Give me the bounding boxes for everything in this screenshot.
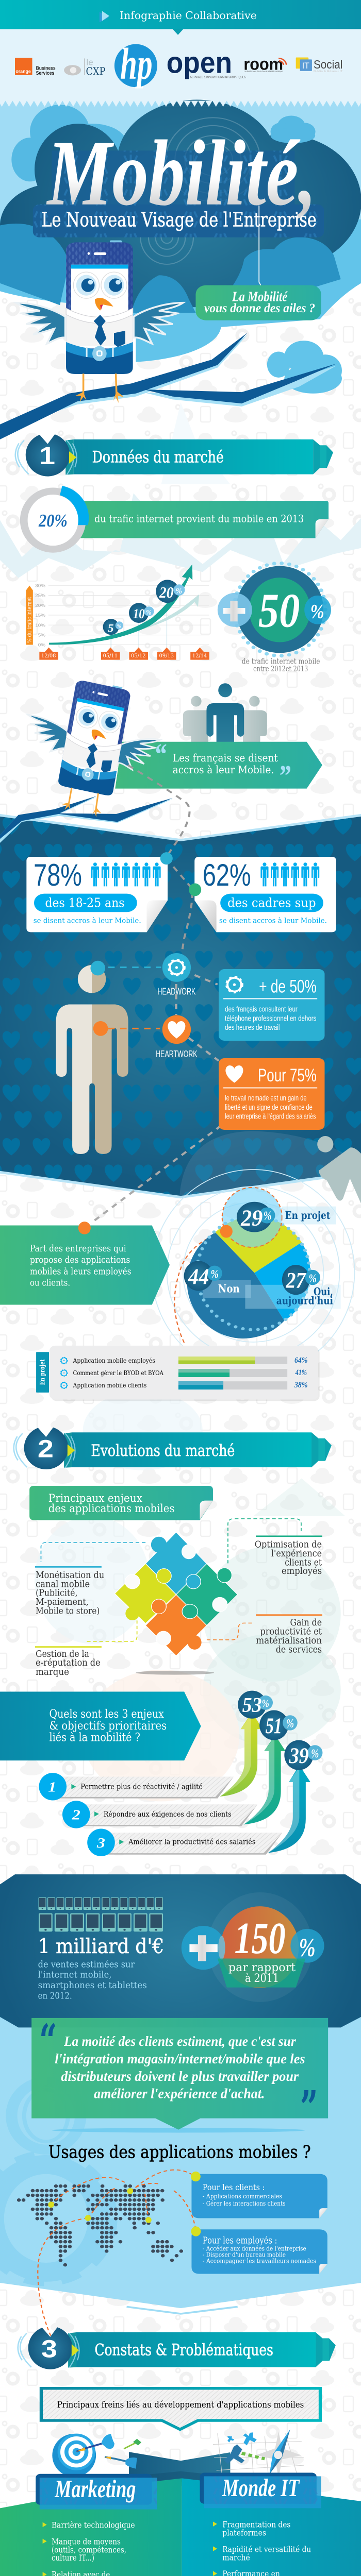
sales description: l'internet mobile, [38, 1969, 112, 1980]
logo: orange business services: Business [36, 66, 56, 71]
owl mascot and branches [0, 240, 342, 439]
quote box: La moitié des clients estiment, que c'est sur [63, 2033, 296, 2049]
logo: orange business services [15, 58, 56, 76]
card: pour les employés: Pour les employés : [203, 2235, 277, 2246]
pie labels: 44 [188, 1264, 209, 1289]
legend panel: projects: 41% [295, 1368, 307, 1377]
pie labels: aujourd'hui [276, 1295, 333, 1307]
logo: le CXP: CXP [86, 65, 105, 78]
caption under +50% [242, 657, 320, 673]
green banner: share of companies: Part des entreprises qui [30, 1243, 126, 1254]
line chart: mobile traffic: 25% [35, 593, 45, 598]
section 1: données du marché [0, 402, 361, 660]
green banner: share of companies [0, 1222, 170, 1305]
legend panel: projects: En projet [38, 1359, 46, 1385]
orange dash path to legend [174, 1235, 214, 1345]
label: gain de productivité: productivité et [260, 1627, 322, 1637]
line chart: mobile traffic: 0% [38, 642, 45, 648]
bubble 51%: 51 [266, 1714, 282, 1738]
line chart: mobile traffic: 05/12 [131, 653, 146, 659]
icon: compass and map [213, 2429, 304, 2478]
header: title bar, logos and cloud sky [0, 0, 361, 362]
hanging sign: La Mobilité [232, 289, 288, 304]
card: + de 50%: des français consultent leur [225, 1005, 298, 1013]
logo: le CXP [64, 58, 105, 78]
green banner: 20% traffic: du trafic internet provient du mobile en 2013 [94, 513, 304, 524]
priority 1 [39, 1773, 234, 1801]
logo: open: SERVICES & INNOVATIONS INFORMATIQUES [190, 76, 246, 79]
pie labels: % [309, 1272, 317, 1285]
green banner: 20% traffic [79, 501, 329, 538]
grey dashed connector [128, 765, 192, 953]
card: pour les clients [191, 2172, 327, 2218]
rising arrow 3 [268, 1765, 310, 1853]
section heading 3: Constats & Problématiques [94, 2341, 273, 2359]
legend panel: projects: 64% [294, 1355, 307, 1364]
bubble 39% [284, 1740, 322, 1770]
quote box: distributeurs doivent le plus travailler pour [61, 2068, 299, 2084]
list: marketing obstacles [43, 2520, 135, 2576]
priority 3 [87, 1828, 282, 1856]
list: IT obstacles: marché [222, 2553, 250, 2563]
rising arrow 1 [220, 1712, 262, 1797]
headwork and heartwork [0, 953, 361, 1375]
badge: +150%: 150 [234, 1913, 286, 1963]
bubble 39%: % [311, 1747, 319, 1760]
title band [33, 150, 324, 238]
card: 78% of 18-25: se disent accros à leur Mobile. [34, 917, 141, 925]
quote banner: accros à leur Mobile. [173, 765, 274, 776]
section heading 1: Données du marché [92, 448, 224, 466]
badge: +150%: % [299, 1933, 316, 1962]
label: gain de productivité: de services [276, 1645, 322, 1655]
orange route arcs [38, 2170, 196, 2336]
bubble 51% [259, 1710, 298, 1740]
line chart: mobile traffic: 20 [159, 584, 174, 601]
donut 20% [20, 486, 89, 553]
card: pour 75%: le travail nomade est un gain de [225, 1094, 307, 1103]
badge: +150% [182, 1892, 324, 2002]
headwork node: HEADWORK [157, 987, 196, 997]
card: 78% of 18-25: 78% [34, 858, 82, 892]
quote box: améliorer l'expérience d'achat. [94, 2085, 265, 2102]
phones pictogram [39, 1897, 163, 1931]
priorities [0, 1691, 322, 1856]
card: pour les employés: - Accéder aux données de l'entreprise [203, 2245, 306, 2252]
list: IT obstacles: Fragmentation des [222, 2520, 290, 2530]
line chart: mobile traffic: % du trafic internet [27, 597, 33, 643]
pie chart: % [264, 1209, 272, 1223]
line chart: mobile traffic: % [117, 623, 121, 629]
label: monde IT: Monde IT [222, 2475, 300, 2502]
label: e-réputation: Gestion de la [36, 1649, 89, 1659]
pale background shapes [35, 1391, 346, 1801]
puzzle shadow [136, 1671, 214, 1675]
card: pour les clients: Pour les clients : [203, 2182, 265, 2192]
card: 62% of executives: des cadres sup [227, 896, 316, 910]
card: 62% of executives: 62% [203, 858, 251, 892]
priority 2 [62, 1801, 257, 1828]
logo: IT Social: IT [302, 61, 309, 71]
quote banner [115, 737, 322, 793]
people icon [183, 683, 267, 743]
label: optimisation: Optimisation de [255, 1540, 322, 1550]
map points [48, 2188, 152, 2223]
logo: roomn: room [243, 55, 283, 74]
label: monde IT [200, 2472, 321, 2508]
line chart: mobile traffic: 05/11 [103, 653, 118, 659]
badge: +50%: 50 [258, 584, 300, 638]
section 2 upper area [14, 1261, 346, 1801]
card: 62% of executives [194, 857, 336, 932]
legend panel: projects: Comment gérer le BYOD et BYOA [73, 1370, 163, 1377]
badge: +50% [218, 563, 331, 656]
green label: main stakes: des applications mobiles [48, 1502, 174, 1515]
line chart: mobile traffic: 20% [35, 603, 45, 608]
logo: roomn: Les Rendez-vous One-to-One de la Mobilité Numérique [244, 71, 283, 72]
badge: +50%: % [310, 601, 324, 623]
line chart: mobile traffic: 10 [133, 607, 144, 622]
label: gain de productivité: Gain de [290, 1618, 322, 1628]
line chart: mobile traffic: 12/14 [192, 653, 207, 659]
logo: IT Social: Social [314, 58, 342, 72]
sky blue band [0, 2012, 361, 2308]
headline: 1 milliard: 1 milliard d'€ [38, 1935, 164, 1958]
section heading 2 [14, 1428, 332, 1469]
mascot 2 on branch [0, 669, 173, 843]
list: marketing obstacles: Manque de moyens [52, 2537, 121, 2547]
label: optimisation [228, 1519, 322, 1577]
line chart: mobile traffic [26, 565, 209, 660]
bubble 53%: 53 [242, 1693, 262, 1717]
label: optimisation: l'expérience [271, 1549, 322, 1559]
logo: HP [114, 39, 157, 89]
legend panel: projects: Application mobile employés [73, 1358, 155, 1365]
pie chart: 29 [240, 1206, 262, 1231]
logo: IT Social [296, 57, 343, 73]
card: 78% of 18-25: des 18-25 ans [45, 896, 125, 910]
green banner: share of companies: ou clients. [30, 1277, 70, 1288]
quote box: ” [300, 2081, 318, 2134]
section 1 continued: addicted to mobile [0, 657, 361, 1198]
quote box [31, 2014, 328, 2134]
pie chart [187, 1188, 336, 1338]
green banner: share of companies: mobiles à leurs employés [30, 1266, 131, 1277]
bubble 53%: % [262, 1697, 269, 1710]
card: 78% of 18-25 [26, 857, 168, 932]
pie labels: Non [218, 1282, 240, 1295]
card: + de 50%: téléphone professionnel en dehors [225, 1014, 316, 1023]
logo: le CXP: le [86, 58, 93, 67]
legend panel: projects [36, 1346, 320, 1401]
dark hearts section [0, 814, 361, 1198]
label: optimisation: employés [282, 1566, 322, 1577]
card: pour les employés: - Disposer d'un bureau mobile [203, 2251, 286, 2259]
arrow banner: three stakes: liés à la mobilité ? [50, 1731, 140, 1744]
sales description: de ventes estimées sur [38, 1959, 135, 1970]
quote banner: Les français se disent [173, 752, 278, 765]
sales and usage [0, 1874, 361, 2308]
line chart: mobile traffic: % [146, 609, 152, 617]
pie labels: Oui, [314, 1286, 333, 1298]
quote box: l'intégration magasin/internet/mobile que les [55, 2050, 305, 2067]
line chart: mobile traffic: 30% [35, 583, 45, 588]
section heading 3 [18, 2327, 336, 2369]
green label: main stakes [29, 1486, 213, 1520]
arrow banner: three stakes: & objectifs prioritaires [50, 1719, 167, 1733]
quote box: “ [39, 2014, 57, 2068]
priority 3: Améliorer la productivité des salariés [128, 1838, 256, 1846]
legend panel: projects: Application mobile clients [73, 1382, 146, 1389]
logo: orange business services: Services [36, 71, 55, 76]
quote banner: “ [154, 737, 167, 771]
section heading 1 [15, 434, 333, 477]
sales description [38, 1959, 147, 2001]
card: pour les employés [191, 2226, 327, 2274]
sales description: en 2012. [38, 1990, 72, 2001]
list: IT obstacles: plateformes [222, 2529, 266, 2538]
pie labels: 27 [286, 1268, 306, 1293]
green banner: share of companies: propose des applications [30, 1255, 130, 1265]
heartwork node: HEARTWORK [156, 1049, 198, 1060]
donut 20%: 20% [38, 511, 68, 531]
list: IT obstacles: Rapidité et versatilité du [222, 2545, 311, 2554]
list: marketing obstacles: culture IT...) [52, 2553, 94, 2563]
mascot on branch [16, 240, 183, 403]
pie labels [184, 1261, 341, 1309]
label: marketing: Marketing [55, 2475, 136, 2503]
puzzle graphic [114, 1532, 238, 1656]
grey dashes between nodes [93, 975, 221, 1222]
label: e-réputation: e-réputation de [36, 1658, 101, 1668]
label: optimisation: clients et [285, 1558, 322, 1568]
section heading 2: 2 [38, 1435, 54, 1463]
bubble 53% [238, 1691, 273, 1719]
list: IT obstacles [213, 2520, 313, 2576]
card: 62% of executives: se disent accros à leur Mobile. [219, 917, 327, 925]
priority 1: Permettre plus de réactivité / agilité [80, 1783, 203, 1791]
green label: main stakes: Principaux enjeux [48, 1492, 142, 1505]
hanging sign: vous donne des ailes ? [204, 300, 315, 315]
card: pour 75% [219, 1058, 324, 1130]
line chart: mobile traffic: 5 [108, 622, 114, 635]
sales description: smartphones et tablettes [38, 1979, 147, 1991]
label: monétisation: (Publicité, [36, 1588, 77, 1598]
card: + de 50%: + de 50% [259, 976, 317, 996]
card: + de 50% [219, 969, 324, 1041]
card: pour 75%: Pour 75% [258, 1065, 317, 1085]
heartwork node [93, 1015, 198, 1060]
list: marketing obstacles: Barrière technologique [52, 2520, 135, 2530]
label: e-réputation: marque [36, 1667, 69, 1677]
arrow banner: three stakes: Quels sont les 3 enjeux [50, 1707, 164, 1720]
label: marketing [36, 2474, 157, 2510]
line chart: mobile traffic: 5% [38, 633, 45, 638]
connector dots [160, 852, 201, 896]
line chart: mobile traffic: 12/08 [41, 653, 56, 659]
framed heading: main obstacles [41, 2388, 320, 2429]
priority 1: 1 [48, 1778, 56, 1795]
priority 2: Répondre aux éxigences de nos clients [104, 1810, 232, 1819]
label: monétisation: Mobile to store) [36, 1606, 100, 1616]
logo: orange business services: orange [15, 69, 31, 74]
label: monétisation: canal mobile [36, 1579, 90, 1589]
dark sales panel [0, 1874, 361, 2027]
world map dots [19, 2186, 182, 2265]
label: monétisation: Monétisation du [36, 1570, 104, 1581]
card: pour les employés: - Accompagner les travailleurs nomades [203, 2258, 316, 2265]
line chart: mobile traffic: 10% [35, 623, 45, 628]
sky and clouds [0, 100, 361, 362]
section heading 3: 3 [41, 2335, 57, 2363]
card: pour 75%: liberté et un signe de confiance de [225, 1104, 313, 1112]
pale mountains [0, 402, 361, 578]
human figure [56, 965, 128, 1154]
label: gain de productivité: matérialisation [256, 1636, 322, 1646]
badge: +150%: à 2011 [245, 1972, 279, 1985]
card: + de 50%: des heures de travail [225, 1024, 280, 1032]
pie labels: % [210, 1268, 219, 1281]
card: pour les clients: - Applications commerciales [203, 2193, 282, 2200]
logo: HP: hp [120, 39, 153, 89]
label: monétisation [35, 1543, 145, 1616]
list: marketing obstacles: (outils, compétences, [52, 2545, 126, 2555]
priority 2: 2 [72, 1807, 80, 1823]
priority 3: 3 [96, 1835, 105, 1851]
two column panels [0, 2452, 361, 2576]
rising arrow 2 [243, 1735, 286, 1824]
section heading 2: Evolutions du marché [91, 1441, 235, 1460]
headwork node [90, 953, 196, 997]
caption under +50%: de trafic internet mobile [242, 657, 320, 666]
hanging sign [195, 206, 321, 320]
bubble 51%: % [286, 1717, 294, 1731]
label: gain de productivité [207, 1614, 322, 1655]
icon: dartboard [52, 2434, 141, 2477]
logo: IT Social: Média & Réseau IT [314, 70, 343, 73]
pale rings [152, 1170, 355, 1375]
world map and usage cards [0, 2170, 361, 2576]
logo: open: open [167, 46, 232, 79]
line chart: mobile traffic: 15% [35, 613, 45, 618]
top title bar: Infographie Collaborative [120, 10, 257, 22]
line chart: mobile traffic: % [176, 586, 182, 596]
legend panel: projects: 38% [294, 1380, 307, 1389]
pie chart: En projet [285, 1210, 331, 1222]
section heading 1: 1 [39, 443, 55, 470]
obstacles lists [0, 2520, 336, 2576]
line chart: mobile traffic: 09/13 [159, 653, 174, 659]
grey tilted person [317, 1136, 361, 1204]
arrow banner: three stakes [0, 1692, 201, 1760]
quote banner: ” [278, 759, 291, 793]
bubble 39%: 39 [289, 1743, 309, 1768]
label: e-réputation [35, 1620, 137, 1677]
label: monétisation: M-paiement, [36, 1597, 89, 1607]
card: pour les clients: - Gérer les interactions clients [203, 2200, 286, 2208]
caption under +50%: entre 2012et 2013 [253, 664, 308, 673]
top title bar [0, 0, 361, 35]
badge: +150%: par rapport [228, 1960, 296, 1974]
